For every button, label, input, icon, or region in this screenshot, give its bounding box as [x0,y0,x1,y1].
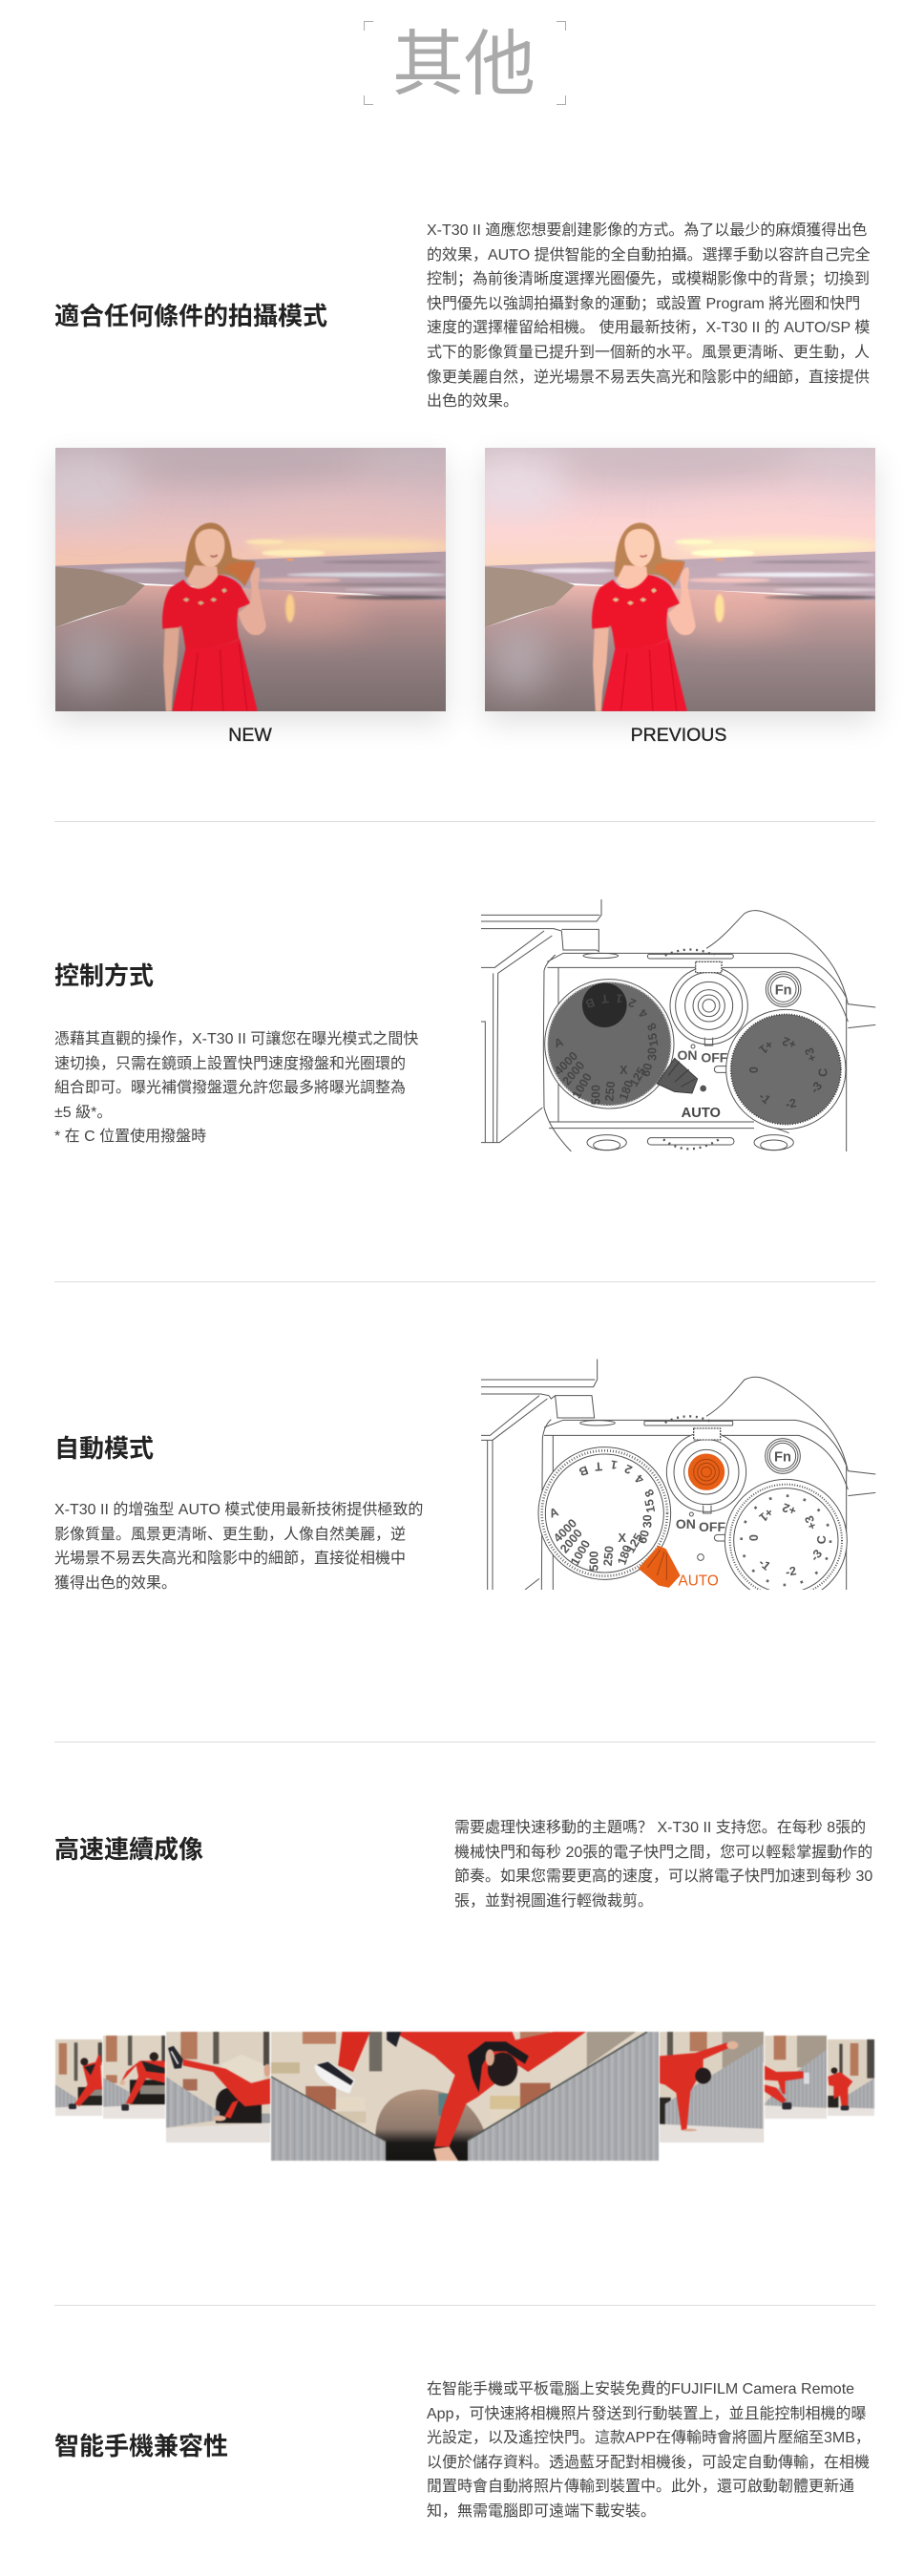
dial labels: -3 [808,1079,825,1096]
frame 2 [103,2035,166,2120]
text block: auto mode description [54,1501,423,1592]
caption: PREVIOUS: PREVIOUS [631,725,726,746]
frame 1 [55,2039,103,2116]
dial labels: +2 [781,1034,798,1051]
text block: shooting modes description: 快門優先以強調拍攝對象的運動；或設置 Program 將光圈和快門 [427,296,860,312]
dial labels: 4000 [552,1049,580,1078]
text block: shooting modes description: 控制；為前後清晰度選擇光圈優先，或模糊影像中的背景；切換到 [427,271,870,287]
dial labels: 4 [633,1471,646,1487]
dial labels: 15 [642,1498,658,1514]
photo strip: burst sequence of dancer [55,2031,875,2162]
dial labels: Fn [775,982,792,998]
frame 7 [827,2038,875,2116]
dial labels: +1 [757,1037,776,1056]
text block: high-speed burst description: 節奏。如果您需要更高的速度，可以將電子快門加速到每秒 30 [454,1869,872,1885]
dial labels: 30 [641,1514,655,1528]
title: 其他 [364,21,566,105]
dial labels: 125 [627,1065,649,1089]
photo: NEW beach portrait [55,448,446,711]
dial labels: -3 [808,1547,825,1564]
photo: PREVIOUS beach portrait [485,448,875,711]
dial labels: -1 [756,1556,773,1573]
text block: shooting modes description: 速度的選擇權留給相機。 使用最新技術，X-T30 II 的 AUTO/SP 模 [427,320,870,336]
text block: smartphone compatibility description: 知，無需電腦即可遠端下載安裝。 [427,2503,656,2520]
frame 3 [166,2031,271,2143]
dial labels: 0 [746,1534,760,1541]
text block: control description: 組合即可。曝光補償撥盤還允許您最多將曝光調整為 [54,1080,406,1096]
dial labels: AUTO [682,1106,721,1121]
dial labels: C [815,1535,829,1544]
text block: smartphone compatibility description: 在智能手機或平板電腦上安裝免費的FUJIFILM Camera Remote [427,2381,854,2397]
dial labels: 2 [626,995,638,1010]
dial labels: ON [676,1516,696,1531]
dial labels: 180 [615,1543,635,1567]
dial labels: AUTO [679,1573,719,1590]
dial labels: 8 [644,1021,660,1033]
dial labels: 2000 [560,1059,587,1087]
dial labels: 1 [615,991,623,1005]
text block: auto mode description: X-T30 II 的增強型 AUTO 模式使用最新技術提供極致的 [54,1502,423,1518]
dial labels: 250 [602,1081,618,1102]
title: 其他: 其他 [392,24,536,104]
dial labels: 1 [610,1457,619,1471]
dial labels: -2 [785,1096,797,1111]
dial labels: 4 [637,1006,650,1021]
dial labels: -1 [756,1089,773,1107]
dial labels: OFF [701,1050,728,1066]
text block: smartphone compatibility description: 以便於儲存資料。透過藍牙配對相機後，可設定自動傳輸，在相機 [427,2455,870,2471]
dial labels: 1000 [568,1538,593,1568]
dial labels: OFF [699,1519,725,1534]
text block: shooting modes description: 出色的效果。 [427,393,518,410]
frame 4 centre [270,2031,659,2162]
dial labels [552,982,830,1121]
dial labels: 60 [639,1062,655,1078]
text block: high-speed burst description: 需要處理快速移動的主題嗎？ X-T30 II 支持您。在每秒 8張的 [454,1820,866,1836]
dial labels: 15 [645,1032,662,1047]
frame 5 [659,2031,765,2143]
text block: shooting modes description: X-T30 II 適應您想要創建影像的方式。為了以最少的麻煩獲得出色 [427,222,867,239]
dial labels: X [618,1531,626,1545]
text block: high-speed burst description: 張，並對視圖進行輕微裁剪。 [454,1893,653,1910]
text block: control description: 憑藉其直觀的操作，X-T30 II 可讓您在曝光模式之間快 [54,1031,418,1047]
illustration: camera top with highlighted dials [481,899,876,1151]
dial labels: C [817,1068,830,1077]
text block: control description: ±5 級*。 [54,1105,112,1121]
dial labels: +3 [803,1514,820,1531]
dial labels: +2 [781,1500,798,1517]
text block: auto mode description: 獲得出色的效果。 [54,1575,177,1592]
text block: shooting modes description [427,222,871,410]
dial labels: Fn [774,1449,791,1465]
dial labels: 8 [642,1487,657,1499]
text block: shooting modes description: 式下的影像質量已提升到一個新的水平。風景更清晰、更生動，人 [427,345,870,361]
dial labels: ON [678,1047,697,1063]
text block: auto mode description: 影像質量。風景更清晰、更生動，人像自然美麗，逆 [54,1527,406,1543]
dial labels: 2 [622,1462,634,1476]
dial labels: 60 [636,1529,652,1545]
heading: smartphone compatibility: 智能手機兼容性 [54,2432,228,2460]
frame 6 [764,2035,828,2120]
text block: smartphone compatibility description: 閒置時會自動將照片傳輸到裝置中。此外，還可啟動韌體更新通 [427,2479,854,2495]
illustration: camera top with orange AUTO lever [481,1359,876,1590]
dial labels: +3 [803,1046,820,1064]
text block: high-speed burst description [454,1819,872,1910]
text block: shooting modes description: 的效果，AUTO 提供智能的全自動拍攝。選擇手動以容許自己完全 [427,247,871,264]
dial labels: A [553,1035,565,1050]
text block: control description: * 在 C 位置使用撥盤時 [54,1129,206,1145]
text block: smartphone compatibility description [427,2380,871,2520]
dial labels: T [600,991,609,1005]
heading: auto mode: 自動模式 [54,1434,154,1463]
dial labels: B [578,1463,590,1479]
text block: smartphone compatibility description: App，可快速將相機照片發送到行動裝置上，並且能控制相機的曝 [427,2406,866,2422]
heading: control: 控制方式 [54,961,154,990]
dial labels: T [594,1459,602,1473]
dial labels: 1000 [570,1071,595,1101]
text block: smartphone compatibility description: 光設定，以及遙控快門。這款APP在傳輸時會將圖片壓縮至3MB， [427,2430,871,2446]
dial labels: 30 [645,1047,659,1061]
dial labels [548,1449,829,1590]
text block: control description [54,1030,418,1145]
dial labels: X [620,1064,628,1077]
dial labels: +1 [757,1505,776,1524]
dial labels: 0 [746,1066,760,1073]
dial labels: -2 [785,1564,797,1579]
dial labels: 500 [588,1551,601,1572]
text block: control description: 速切換，只需在鏡頭上設置快門速度撥盤和光圈環的 [54,1056,406,1072]
dial labels: 180 [617,1079,636,1102]
text block: high-speed burst description: 機械快門和每秒 20張的電子快門之間，您可以輕鬆掌握動作的 [454,1845,872,1861]
dial labels: B [583,995,597,1011]
caption: NEW: NEW [228,725,272,746]
text block: shooting modes description: 像更美麗自然，逆光場景不易丟失高光和陰影中的細節，直接提供 [427,370,870,386]
dial labels: 250 [601,1546,617,1567]
heading: high-speed burst: 高速連續成像 [54,1835,203,1864]
dial labels: A [548,1505,560,1521]
text block: auto mode description: 光場景不易丟失高光和陰影中的細節，直接從相機中 [54,1551,406,1567]
dial labels: 4000 [551,1516,579,1545]
dial labels: 2000 [557,1527,585,1555]
dial labels: 125 [624,1531,645,1555]
dial labels: 500 [589,1085,602,1105]
heading: shooting modes: 適合任何條件的拍攝模式 [54,302,327,330]
